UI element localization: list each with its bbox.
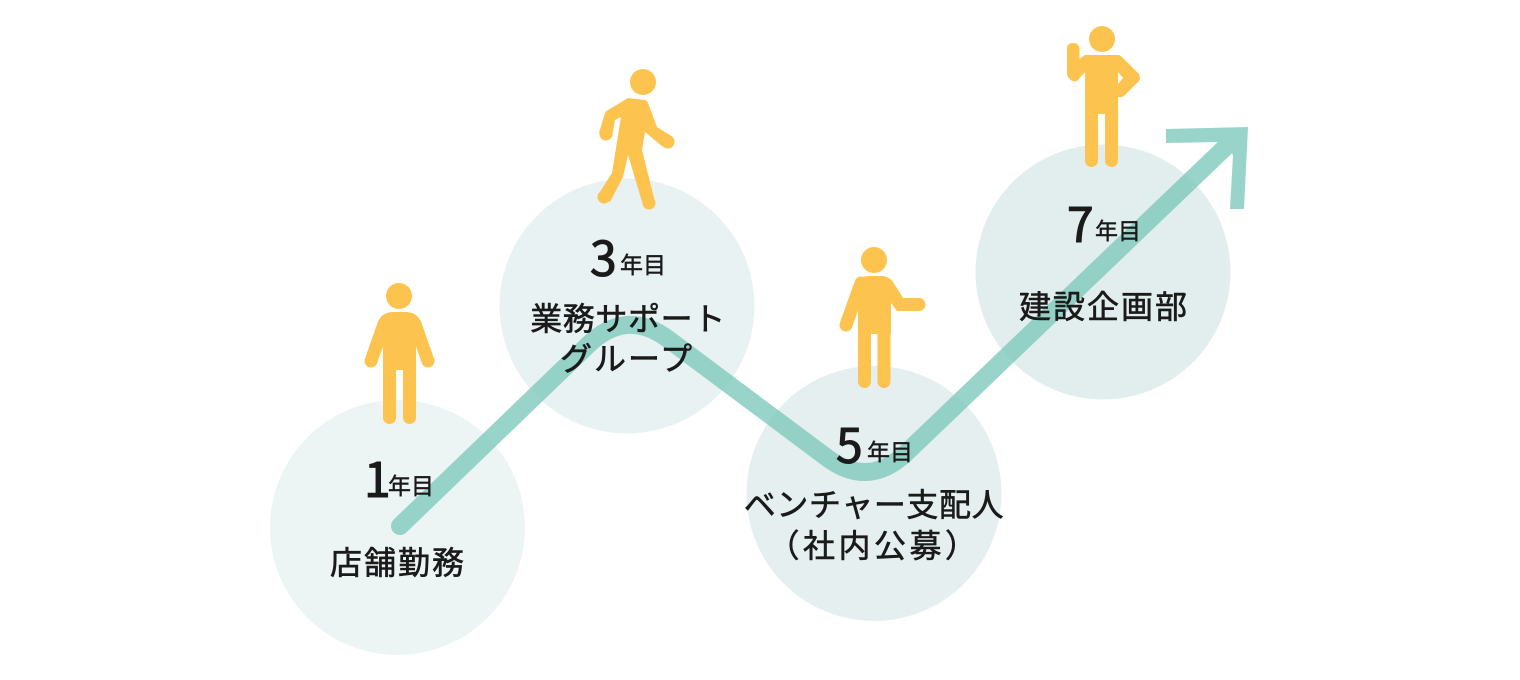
person: year 1 (371, 283, 428, 418)
person: year 3 (598, 69, 674, 210)
label: year 7: 7 (1067, 186, 1094, 256)
person: year 5 (846, 247, 926, 382)
label: year 7: 年目 (1095, 212, 1141, 246)
label: year 1 (330, 441, 466, 584)
label: year 3: 業務サポート (530, 294, 726, 340)
label: year 5: ベンチャー支配人 (744, 480, 1004, 526)
circle: year 1 (270, 400, 525, 655)
circle: year 3 (500, 178, 754, 434)
label: year 5: （社内公募） (767, 521, 981, 567)
label: year 3: 年目 (620, 246, 666, 280)
label: year 7 (1019, 186, 1189, 328)
label: year 3 (530, 220, 726, 380)
label: year 5: 5 (836, 407, 863, 477)
person: year 7 (1067, 26, 1140, 160)
label: year 3: 3 (590, 220, 617, 290)
circle: year 5 (746, 366, 1002, 621)
circle: year 7 (976, 144, 1230, 400)
label: year 5 (744, 407, 1004, 567)
label: year 7: 建設企画部 (1019, 282, 1189, 328)
label: year 1: 1 (364, 441, 391, 511)
career arrow (400, 127, 1248, 526)
label: year 3: グループ (560, 334, 694, 380)
label: year 1: 年目 (388, 467, 434, 501)
label: year 1: 店舗勤務 (330, 538, 466, 584)
label: year 5: 年目 (867, 433, 913, 467)
